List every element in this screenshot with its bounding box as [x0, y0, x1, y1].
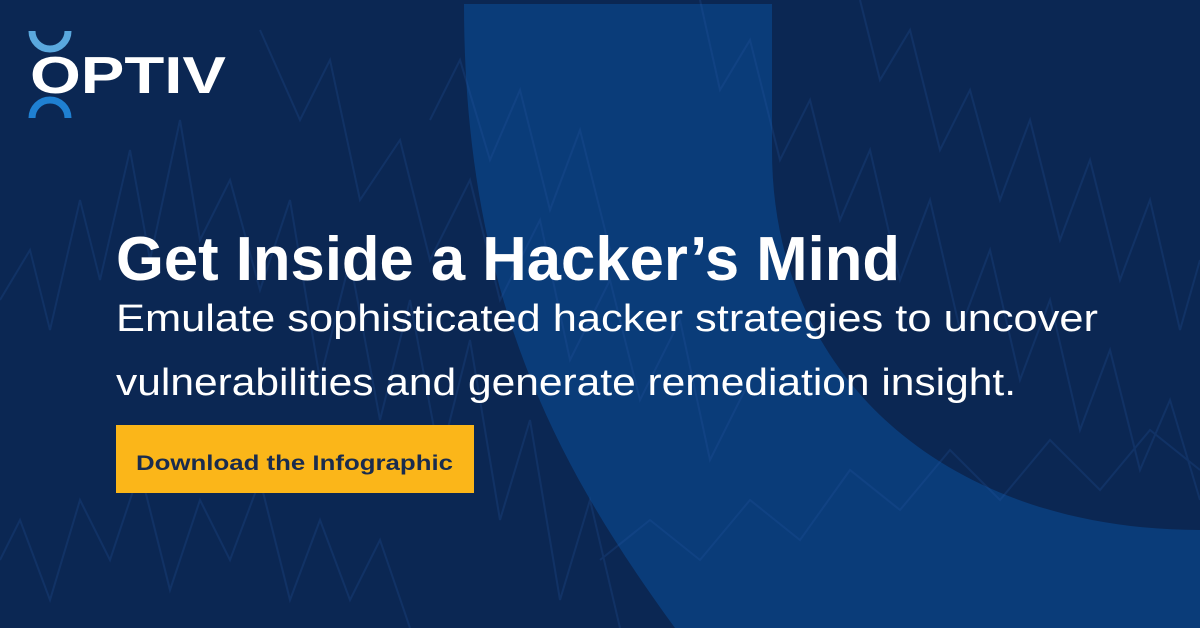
logo: OPTIV [30, 31, 226, 118]
subtitle [116, 298, 1098, 404]
logo wordmark: OPTIV [30, 47, 226, 105]
subtitle: Emulate sophisticated hacker strategies to uncover [116, 298, 1098, 340]
icon: bottom arc [32, 100, 68, 118]
button: download: Download the Infographic [136, 452, 453, 475]
title: Get Inside a Hacker’s Mind [116, 225, 900, 294]
decorative arc band [464, 4, 1200, 628]
icon: top arc [32, 31, 68, 49]
subtitle: vulnerabilities and generate remediation insight. [116, 362, 1016, 404]
button: download [116, 425, 474, 493]
